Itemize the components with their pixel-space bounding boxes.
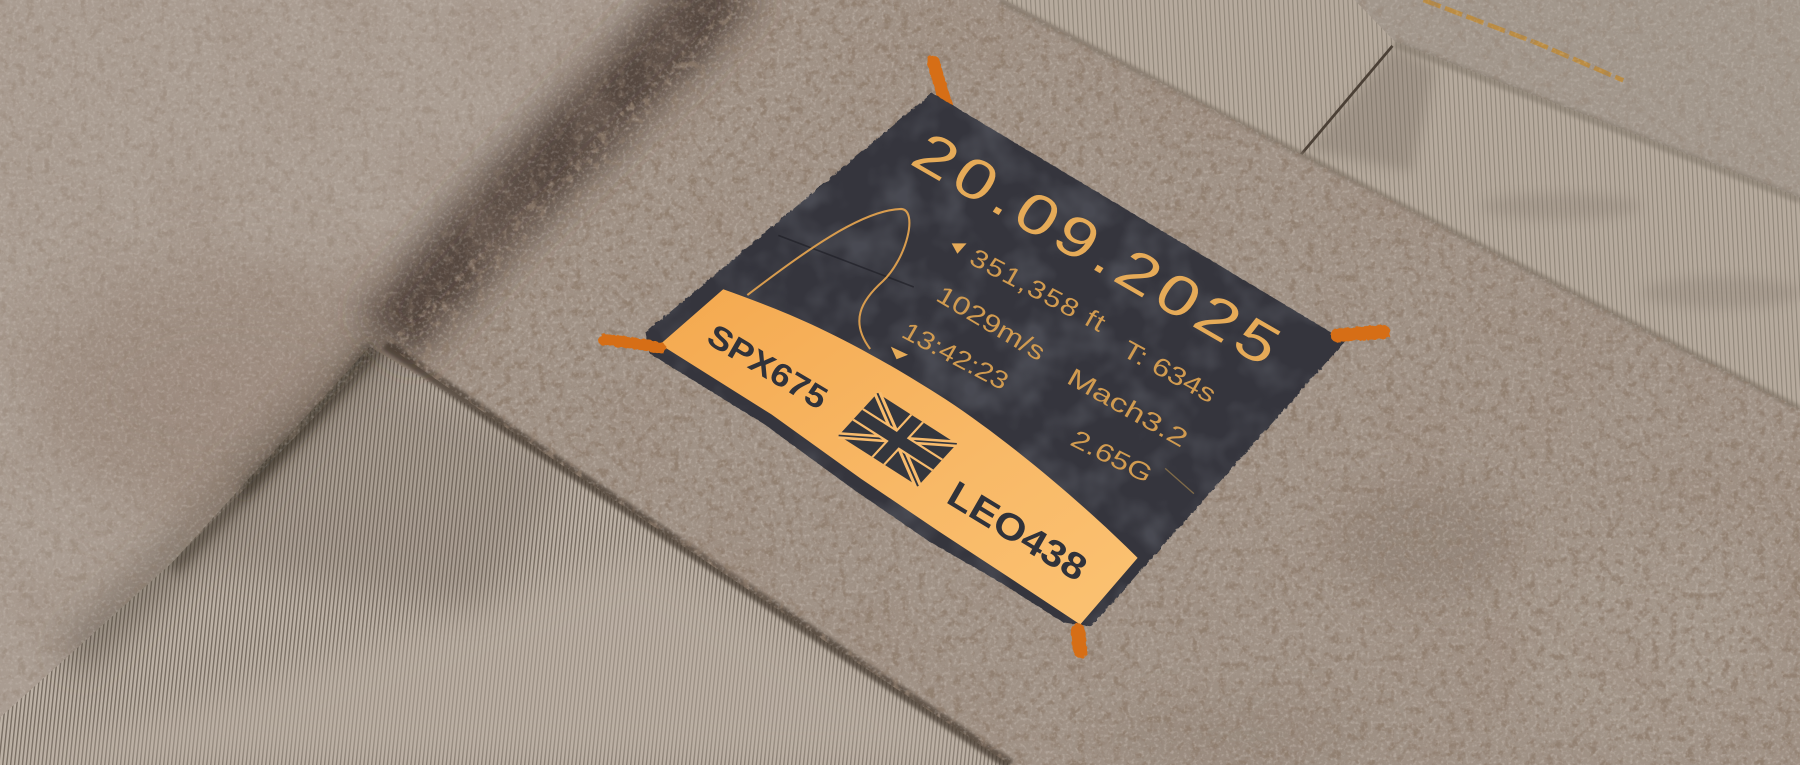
- dark label body: [645, 93, 1345, 627]
- shadow fold across coat: [69, 0, 735, 660]
- trajectory curve: [747, 209, 1194, 494]
- felt stains and specks: [386, 0, 1800, 765]
- icon: right thread: [1337, 332, 1383, 335]
- icon: left thread: [604, 340, 660, 348]
- date heading: 20.09.2025: [901, 120, 1293, 378]
- label mottling: [664, 114, 1316, 626]
- panel: centre felt lapel: [386, 0, 1800, 765]
- icon: apogee marker: [952, 243, 967, 254]
- panel: lower-left corduroy lining: [0, 344, 1010, 765]
- telemetry: mach: Mach3.2: [1062, 363, 1193, 453]
- telemetry: altitude: 351,358 ft: [965, 243, 1111, 337]
- orange band: [660, 289, 1138, 624]
- patch: mission label: [645, 93, 1345, 627]
- telemetry: clock: 13:42:23: [897, 316, 1014, 395]
- telemetry: g force: 2.65G: [1066, 425, 1157, 489]
- coat texture: [0, 0, 734, 714]
- panel: upper-right corduroy lining: [1004, 0, 1800, 411]
- panel: upper-right lapel with orange stitching: [1355, 0, 1800, 200]
- icon: top thread: [933, 62, 947, 108]
- telemetry: time: T: 634s: [1117, 336, 1221, 409]
- icon: union flag: [839, 393, 957, 486]
- icon: landing marker: [891, 347, 908, 359]
- band text: LEO438: LEO438: [941, 473, 1094, 590]
- telemetry: velocity: 1029m/s: [931, 280, 1050, 367]
- band text: SPX675: SPX675: [701, 318, 833, 417]
- icon: bottom thread: [1078, 630, 1080, 651]
- lapel texture: [1355, 0, 1800, 197]
- background: upper-left coat fabric: [0, 0, 640, 717]
